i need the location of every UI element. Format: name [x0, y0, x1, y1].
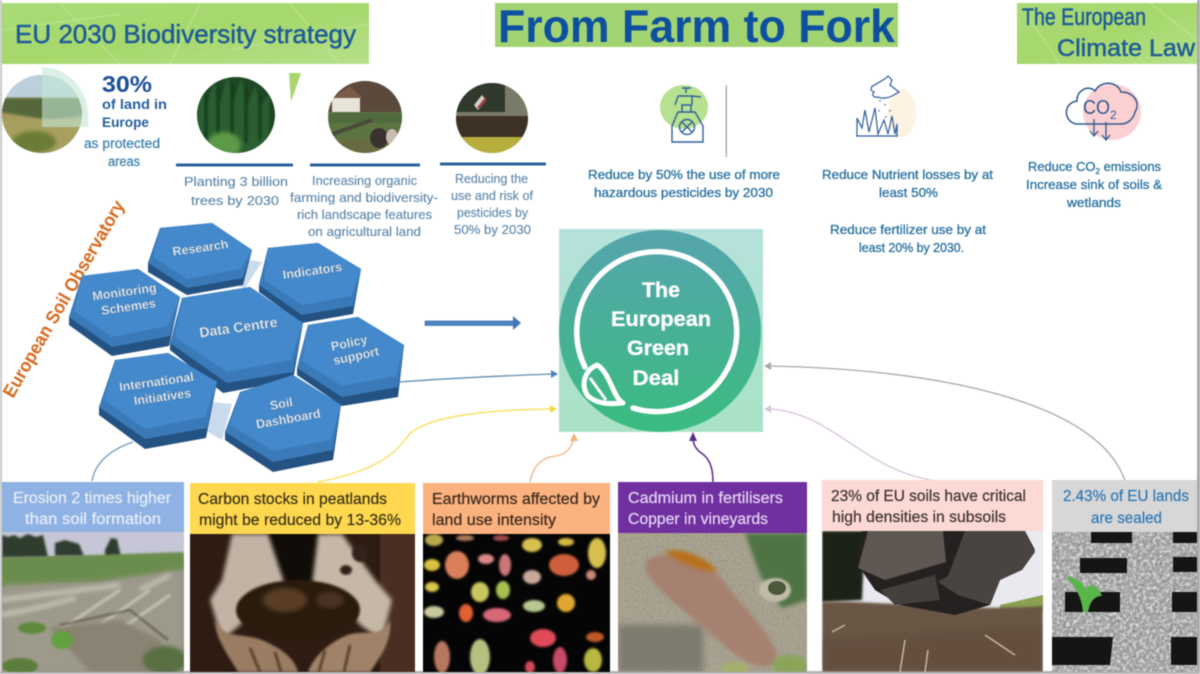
panel: soil sealing: are sealed: [1091, 510, 1162, 527]
hexagon: Policy support: [297, 317, 404, 406]
panel: carbon stocks: Carbon stocks in peatlands: [198, 491, 387, 508]
panel: earthworms: land use intensity: [432, 512, 556, 529]
column: planting trees: [176, 164, 293, 208]
text block: nutrient and fertilizer targets: Reduce Nutrient losses by at: [822, 168, 994, 182]
panel: earthworms: Earthworms affected by: [432, 491, 600, 508]
text block: 30% of land in Europe: as protected: [84, 136, 160, 151]
divider: [726, 85, 727, 157]
panel: erosion: Erosion 2 times higher: [13, 490, 171, 507]
panel: subsoil compaction: high densities in subsoils: [832, 509, 1006, 526]
photo: soil in hands: [190, 534, 415, 672]
hexagon: Monitoring Schemes: Monitoring: [91, 281, 157, 303]
text block: nutrient and fertilizer targets: least 50%: [879, 186, 938, 200]
text block: nutrient and fertilizer targets: [822, 168, 994, 255]
panel: carbon stocks: might be reduced by 13-36%: [199, 512, 401, 529]
panel: erosion: [0, 482, 187, 674]
text block: climate targets: [1026, 160, 1163, 210]
emblem: The European Green Deal: Deal: [632, 366, 680, 390]
arrow: policy support to Green Deal: [400, 370, 558, 382]
text block: pesticide target: hazardous pesticides by 2030: [594, 186, 773, 200]
panel: soil sealing: 2.43% of EU lands: [1063, 488, 1189, 505]
column: planting trees: trees by 2030: [191, 193, 279, 208]
photo: protected land: [0, 74, 84, 155]
photo: tractor wheel on soil: [822, 531, 1043, 672]
emblem: The European Green Deal: Green: [627, 336, 689, 360]
emblem: The European Green Deal: European: [611, 307, 711, 331]
column: organic farming: farming and biodiversity-: [290, 190, 438, 205]
column: organic farming: on agricultural land: [308, 224, 421, 239]
text block: climate targets: Increase sink of soils &: [1026, 178, 1163, 192]
text block: pesticide target: [588, 168, 780, 200]
column: planting trees: Planting 3 billion: [184, 174, 288, 189]
hexagon: Soil Dashboard: Dashboard: [255, 406, 322, 432]
hexagon: Indicators: Indicators: [282, 260, 343, 282]
panel: cadmium: Copper in vineyards: [628, 511, 768, 528]
hexagon: Policy support: Policy: [330, 332, 369, 354]
accent: translucent leaf on protected land photo: [42, 67, 88, 127]
hexagon: International Initiatives: Initiatives: [133, 386, 192, 408]
text block: 30% of land in Europe: 30%: [102, 71, 152, 97]
text block: nutrient and fertilizer targets: least 20% by 2030.: [859, 241, 964, 255]
column: reducing pesticides: pesticides by: [457, 205, 528, 220]
hexagon: Monitoring Schemes: [69, 269, 180, 356]
photo: pesticide sprayer: [455, 80, 530, 155]
column: reducing pesticides: Reducing the: [455, 171, 528, 186]
icon: pesticide spray bottle: [660, 85, 708, 142]
connector: erosion to hexagons: [92, 442, 133, 481]
arrow: sealing to Green Deal: [764, 362, 1125, 481]
hexagon: Research: [148, 223, 252, 295]
hexagon: Data Centre: [170, 287, 303, 393]
text block: climate targets: wetlands: [1066, 196, 1121, 210]
heading: The European Climate Law: [1017, 3, 1197, 64]
heading: EU 2030 Biodiversity strategy: [2, 3, 369, 64]
icon: CO2 cloud: 2: [1110, 108, 1117, 122]
arrow: observatory to Green Deal: [425, 316, 521, 330]
photo: contaminated puddle: [618, 533, 808, 674]
text block: 30% of land in Europe: [84, 71, 167, 169]
label: European Soil Observatory: European Soil Observatory: [0, 196, 129, 401]
text block: climate targets: emissions: [1100, 160, 1161, 174]
panel: cadmium: Cadmium in fertilisers: [628, 490, 783, 507]
panel: subsoil compaction: 23% of EU soils have critical: [831, 488, 1026, 505]
column: organic farming: rich landscape features: [297, 207, 432, 222]
title: From Farm to Fork: From Farm to Fork: [498, 0, 895, 52]
hexagon: Research: Research: [172, 237, 229, 259]
hexagon: Soil Dashboard: Soil: [269, 395, 294, 413]
hexagon: Indicators: [259, 243, 361, 323]
arrow: cadmium to Green Deal: [689, 432, 713, 482]
column: reducing pesticides: use and risk of: [451, 188, 533, 203]
hexagon: International Initiatives: International: [118, 370, 195, 394]
photo: plant in paving: [1052, 531, 1197, 672]
hexagon: Soil Dashboard: [225, 375, 341, 472]
icon: CO2 cloud: [1066, 83, 1141, 140]
panel: carbon stocks: [190, 483, 415, 672]
column: organic farming: [290, 164, 438, 239]
emblem: The European Green Deal: The: [642, 278, 680, 302]
text block: pesticide target: Reduce by 50% the use of more: [588, 168, 780, 182]
column: organic farming: Increasing organic: [312, 173, 417, 188]
accent: green wedge: [289, 73, 301, 102]
text block: 30% of land in Europe: of land in: [102, 96, 167, 112]
hexagon: Data Centre: Data Centre: [198, 314, 279, 340]
photo: soil fauna: [423, 534, 610, 674]
heading: The European Climate Law: The European: [1022, 4, 1146, 31]
panel: earthworms: [423, 483, 610, 674]
arrow: subsoils to Green Deal: [764, 405, 936, 481]
arrow: earthworms to Green Deal: [530, 433, 578, 482]
panel: cadmium: [618, 482, 808, 674]
icon: CO2 cloud: CO: [1083, 97, 1110, 119]
column: reducing pesticides: [440, 162, 546, 237]
text block: climate targets: Reduce CO: [1028, 160, 1093, 174]
text block: nutrient and fertilizer targets: Reduce fertilizer use by at: [830, 223, 987, 237]
icon: hand fertilising grass: [856, 76, 916, 137]
panel: subsoil compaction: [822, 480, 1043, 672]
panel: erosion: than soil formation: [25, 511, 161, 528]
panel: soil sealing: [1052, 480, 1197, 672]
heading: EU 2030 Biodiversity strategy: EU 2030 Biodiversity strategy: [15, 19, 356, 49]
photo: farm and cows: [325, 80, 405, 155]
hexagon: International Initiatives: [99, 353, 217, 449]
hexagon: Monitoring Schemes: Schemes: [100, 296, 157, 318]
photo: eroded field: [0, 532, 187, 674]
heading: The European Climate Law: Climate Law: [1057, 35, 1196, 62]
column: reducing pesticides: 50% by 2030: [454, 222, 531, 237]
hexagon: Policy support: support: [332, 344, 381, 368]
arrow: carbon to Green Deal: [318, 405, 557, 482]
emblem: The European Green Deal: [559, 229, 763, 432]
text block: climate targets: 2: [1095, 167, 1101, 176]
text block: 30% of land in Europe: Europe: [102, 114, 149, 130]
photo: forest: [195, 75, 277, 158]
text block: 30% of land in Europe: areas: [108, 154, 140, 169]
hexagon cluster: soil observatory: [69, 223, 404, 472]
